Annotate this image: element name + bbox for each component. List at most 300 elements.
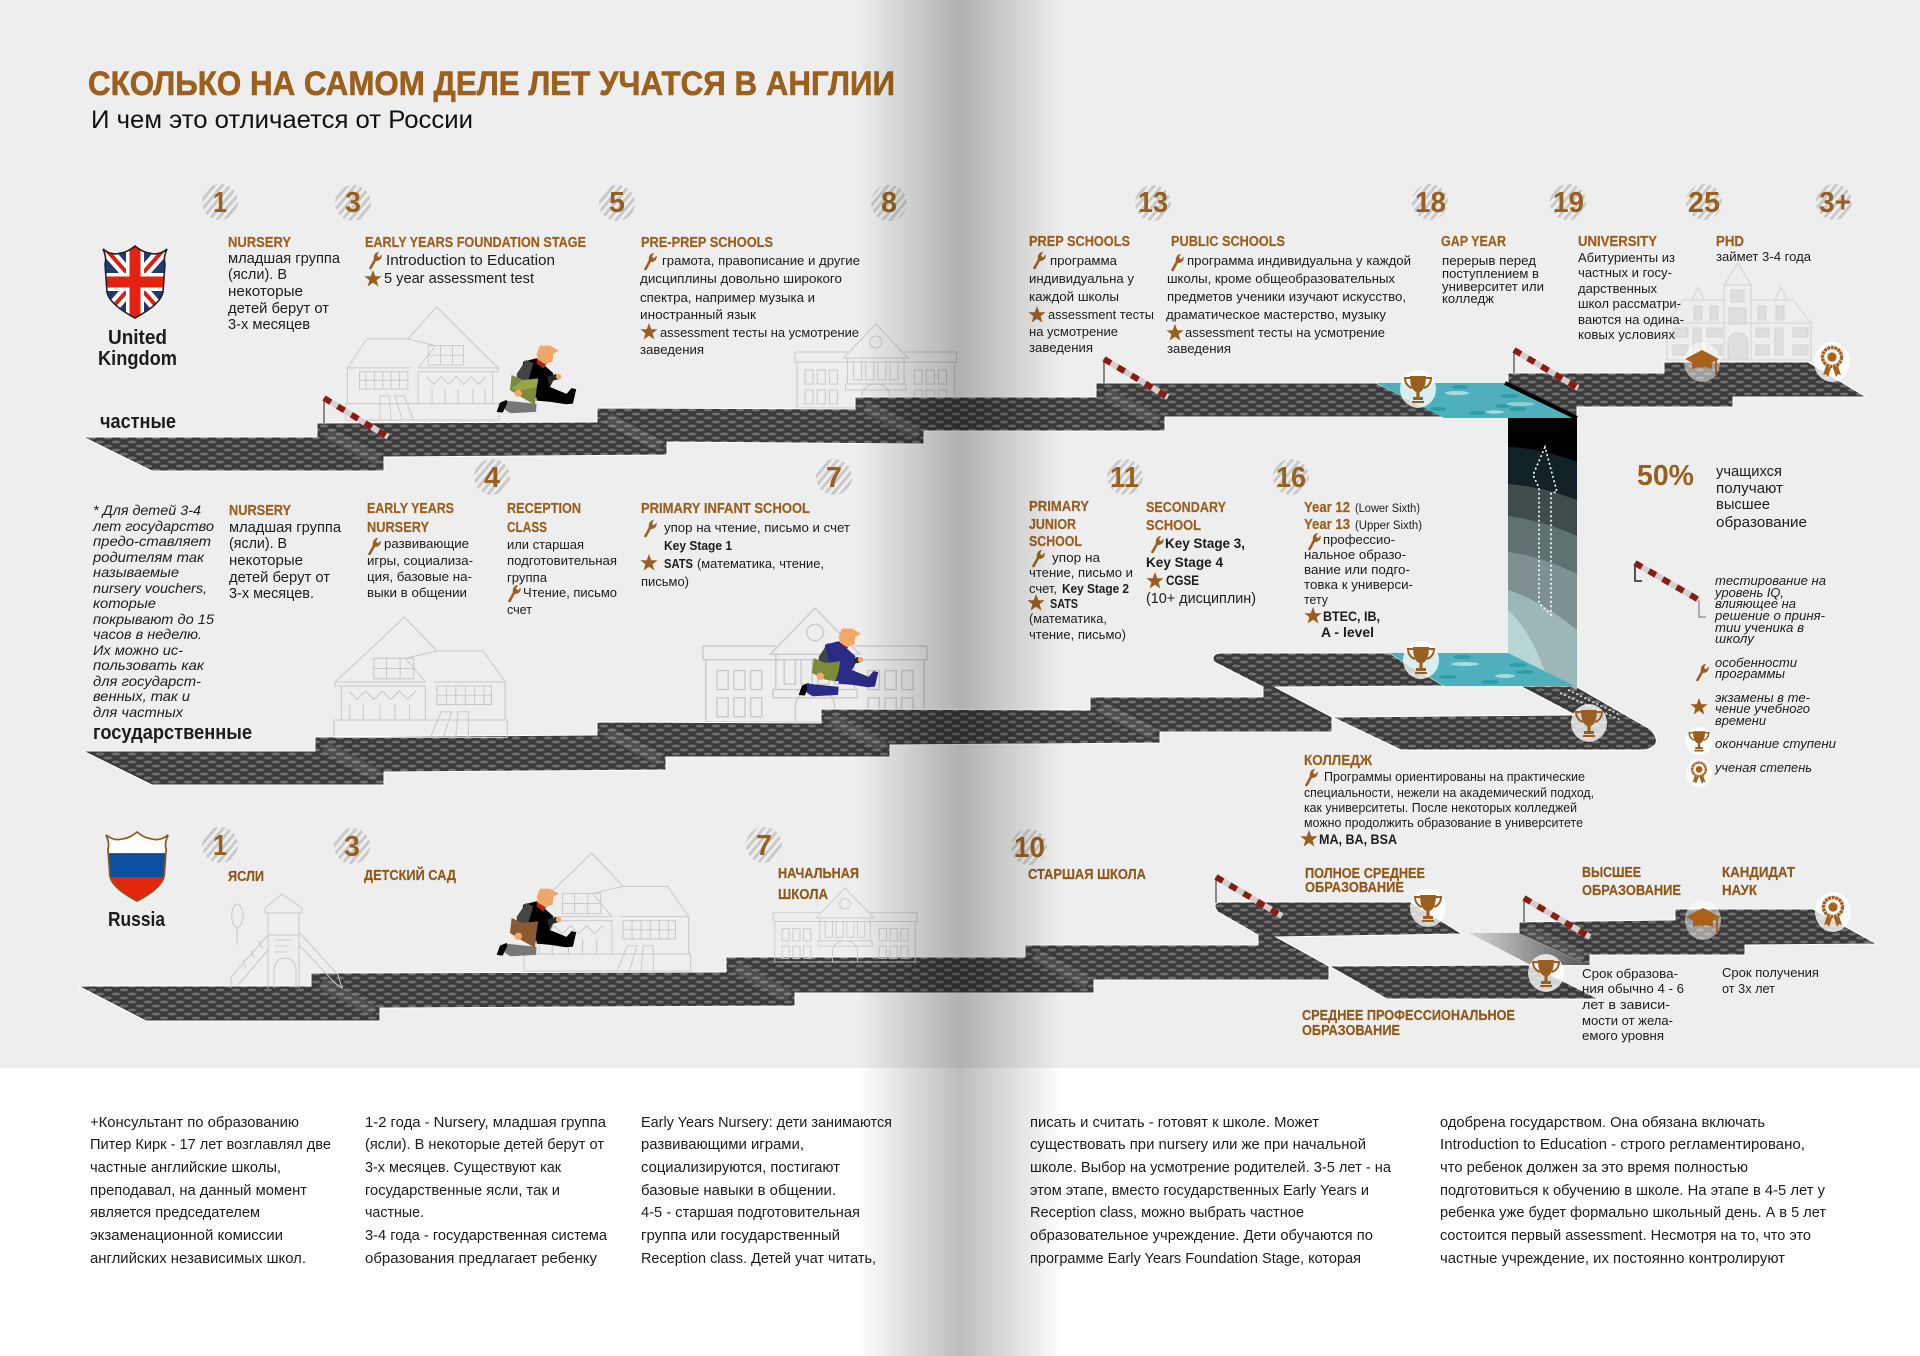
year markers row 3 [202, 827, 1047, 865]
text: primary junior school: чтение, письмо и [1029, 565, 1133, 580]
icon: Russia ribbon [1815, 892, 1851, 932]
year markers row 1: 8 [881, 187, 897, 219]
text: higher education duration: мости от жела- [1582, 1013, 1673, 1028]
barrier: private 13 [1104, 359, 1168, 397]
year markers row 2: 11 [1110, 462, 1139, 494]
label: United Kingdom [98, 327, 177, 370]
bottom text column 4: Reception class, можно выбрать частное [1030, 1205, 1304, 1221]
text: gap year: колледж [1442, 291, 1494, 306]
icon: trophy college [1571, 704, 1607, 742]
year markers row 1: 18 [1415, 187, 1446, 219]
legend: testing text: школу [1715, 632, 1755, 646]
text: secondary school: CGSE [1166, 572, 1199, 588]
icon: Russia trophy secondary [1410, 889, 1446, 927]
bottom text column 5: ребенка уже будет формально школьный день. А в 5 лет [1440, 1205, 1826, 1221]
text: reception class: подготовительная [507, 553, 617, 568]
bottom text column 1: экзаменационной комиссии [90, 1228, 283, 1244]
label: higher education: ВЫСШЕЕ [1582, 865, 1641, 881]
vertical drop between private and state schools [1508, 417, 1577, 690]
bottom text column 2: образования предлагает ребенку [365, 1251, 598, 1267]
text: nursery state: NURSERY [229, 503, 291, 519]
text: years 12 and 13: нальное образо- [1304, 547, 1406, 562]
text: years 12 and 13: A - level [1321, 624, 1374, 640]
text: reception class: RECEPTION [507, 501, 581, 517]
text: secondary school: Key Stage 3, [1165, 535, 1245, 551]
text: college: как университеты. После некоторых колледжей [1304, 800, 1577, 815]
text: primary junior school: (математика, [1029, 611, 1107, 626]
subtitle: И чем это отличается от России [91, 106, 473, 134]
label: kindergarten: ДЕТСКИЙ САД [364, 866, 457, 884]
playground with balloon [231, 894, 342, 988]
bottom text column 4: школе. Выбор на усмотрение родителей. 3-5 лет - на [1030, 1160, 1392, 1176]
text: prep schools: на усмотрение [1029, 324, 1118, 339]
legend: testing text: влияющее на [1715, 597, 1796, 611]
legend: degree text: ученая степень [1714, 761, 1812, 775]
buildings: university castle [1667, 263, 1811, 360]
label: vocational: ОБРАЗОВАНИЕ [1302, 1023, 1400, 1039]
text: public schools [1166, 234, 1411, 356]
label: primary school: ШКОЛА [778, 887, 828, 903]
text: public schools: школы, кроме общеобразовательных [1167, 271, 1396, 286]
text: university: ковых условиях [1578, 327, 1676, 342]
text: nursery state: (ясли). В [229, 536, 287, 552]
text: pre-prep schools: PRE-PREP SCHOOLS [641, 235, 773, 251]
text: higher education duration: емого уровня [1582, 1028, 1664, 1043]
label: state: государственные [93, 722, 252, 744]
text: vouchers footnote: для государст- [93, 673, 201, 689]
text: gap year: GAP YEAR [1441, 234, 1506, 250]
text: college: MA, BA, BSA [1319, 832, 1397, 847]
label: primary school [778, 866, 859, 903]
road: private school row [83, 383, 1444, 471]
bottom text column 3: 4-5 - старшая подготовительная [641, 1205, 860, 1221]
label: vocational [1302, 1008, 1515, 1039]
icon: trophy gap year [1400, 370, 1436, 408]
text: nursery state: некоторые [229, 553, 303, 569]
stat: 50 percent: высшее [1716, 496, 1770, 513]
text: early years foundation stage: 5 year assessment test [384, 270, 535, 287]
bottom text column 4: писать и считать - готовят к школе. Может [1030, 1115, 1319, 1131]
text: vouchers footnote: родителям так [92, 549, 205, 565]
stat: 50 percent: 50% [1637, 460, 1694, 492]
text: prep schools: PREP SCHOOLS [1029, 234, 1130, 250]
buildings: row 1 school [795, 324, 957, 408]
text: secondary school: SCHOOL [1146, 518, 1201, 534]
legend: programme features text: программы [1715, 667, 1785, 681]
text: primary infant school: (математика, чтение, [697, 556, 824, 571]
text: primary junior school [1027, 499, 1133, 642]
text: early years nursery: NURSERY [367, 520, 429, 536]
text: pre-prep schools: assessment тесты на усмотрение [660, 325, 859, 340]
stat: 50 percent: образование [1716, 514, 1807, 531]
text: pre-prep schools: иностранный язык [640, 307, 756, 322]
text: primary infant school [640, 501, 850, 589]
text: pre-prep schools: грамота, правописание и другие [662, 253, 860, 268]
text: vouchers footnote: Их можно ис- [93, 642, 183, 658]
black edge of the gap [1505, 383, 1577, 418]
text: candidate duration: Срок получения [1722, 965, 1819, 980]
buildings: row 1 house [346, 307, 499, 420]
bottom text column 3: развивающими играми, [641, 1137, 804, 1153]
text: university: школ рассматри- [1578, 296, 1681, 311]
bottom text column 1: преподавал, на данный момент [90, 1183, 307, 1199]
bottom text column 5: что ребенок должен за это время полностью [1440, 1160, 1748, 1176]
text: reception class: группа [507, 570, 548, 585]
year markers row 1: 3+ [1819, 187, 1851, 219]
text: vouchers footnote: лет государство [92, 518, 214, 534]
text: early years foundation stage: EARLY YEARS FOUNDATION STAGE [365, 235, 586, 251]
centre fold shadow [857, 0, 1063, 1356]
label: United Kingdom: United [108, 327, 167, 349]
step highlights on roads [321, 393, 1584, 1011]
label: full secondary [1305, 866, 1425, 896]
icon: ribbon [1814, 342, 1850, 382]
text: years 12 and 13: (Upper Sixth) [1355, 520, 1422, 532]
legend: programme features text [1715, 656, 1797, 681]
text: gap year [1441, 234, 1544, 306]
year markers row 1: 25 [1688, 187, 1720, 219]
text: university [1578, 234, 1684, 342]
barrier: private 5-8 [324, 398, 388, 437]
icon: Russia graduation cap [1685, 900, 1721, 940]
legend: testing text: решение о приня- [1714, 609, 1825, 623]
bottom text column 4: программе Early Years Foundation Stage, которая [1030, 1251, 1361, 1267]
text: vouchers footnote: для частных [93, 704, 184, 720]
year markers row 3: 10 [1014, 832, 1045, 864]
bottom text column 4: этом этапе, вместо государственных Early Years и [1030, 1183, 1369, 1199]
label: nursery: ЯСЛИ [228, 869, 264, 885]
text: higher education duration: лет в зависи- [1582, 997, 1670, 1012]
text: prep schools: заведения [1029, 340, 1093, 355]
bottom text column 5 [1440, 1115, 1826, 1267]
text: nursery private: младшая группа [228, 251, 341, 267]
text: prep schools: каждой школы [1029, 289, 1119, 304]
text: primary junior school: чтение, письмо) [1029, 627, 1126, 642]
text: primary infant school: Key Stage 1 [664, 538, 732, 553]
legend: barrier [1635, 563, 1706, 617]
text: pre-prep schools: спектра, например музыка и [640, 290, 815, 305]
bottom text column 5: Introduction to Education - строго регламентировано, [1440, 1137, 1805, 1153]
year markers row 3: 3 [344, 831, 360, 863]
text: primary junior school: Key Stage 2 [1062, 581, 1129, 596]
bottom text column 1: Питер Кирк - 17 лет возглавлял две [90, 1137, 331, 1153]
bottom text column 5: подготовиться к обучению в школе. На этапе в 4-5 лет у [1440, 1183, 1826, 1199]
text: public schools: драматическое мастерство, музыку [1166, 307, 1386, 322]
bottom text column 1: английских независимых школ. [90, 1251, 306, 1267]
buildings: row 2 school [703, 608, 927, 722]
text: public schools: заведения [1167, 341, 1231, 356]
text: primary infant school: SATS [664, 556, 693, 571]
text: years 12 and 13: профессио- [1323, 532, 1395, 547]
text: years 12 and 13: Year 12 [1304, 499, 1350, 516]
text: higher education duration: Срок образова- [1582, 966, 1678, 981]
text: gap year: поступлением в [1442, 266, 1539, 281]
text: nursery private: (ясли). В [228, 267, 287, 283]
label: United Kingdom: Kingdom [98, 348, 177, 370]
legend [1635, 563, 1836, 787]
text: pre-prep schools: дисциплины довольно широкого [640, 271, 842, 286]
label: candidate of sciences: НАУК [1722, 883, 1757, 899]
text: university: Абитуриенты из [1578, 250, 1675, 265]
bottom text column 1: +Консультант по образованию [90, 1115, 299, 1131]
text: years 12 and 13: Year 13 [1304, 516, 1350, 533]
year markers row 1: 5 [609, 187, 625, 219]
text: primary junior school: счет, [1029, 581, 1057, 596]
bottom text column 5: частные учреждение, их постоянно контролируют [1440, 1251, 1785, 1267]
year markers row 3: 7 [756, 830, 772, 862]
text: college: Программы ориентированы на практические [1324, 769, 1585, 784]
Russia stage labels [228, 865, 1795, 1039]
text: nursery state [229, 503, 342, 602]
text: public schools: assessment тесты на усмотрение [1185, 325, 1385, 340]
text: university: частных и госу- [1578, 265, 1672, 280]
shield: UK flag [103, 246, 167, 318]
text: vouchers footnote: * Для детей 3-4 [93, 502, 201, 518]
bottom text column 3: группа или государственный [641, 1228, 840, 1244]
text: nursery private: детей берут от [228, 301, 329, 317]
shield: Russia flag [106, 832, 168, 902]
legend: testing text: тии ученика в [1715, 621, 1804, 635]
text: prep schools: индивидуальна у [1029, 271, 1134, 286]
text: university: UNIVERSITY [1578, 234, 1657, 250]
text: gap year: перерыв перед [1442, 253, 1536, 268]
text: early years nursery: EARLY YEARS [367, 501, 454, 517]
text: college: можно продолжить образование в университете [1304, 815, 1583, 830]
text: nursery state: младшая группа [229, 520, 342, 536]
text: nursery state: 3-х месяцев. [229, 586, 314, 602]
label: private: частные [100, 411, 176, 433]
text: primary junior school: SATS [1050, 596, 1078, 611]
label: candidate of sciences [1722, 865, 1795, 899]
text: vouchers footnote: венных, так и [93, 688, 190, 704]
grey upper panel [0, 0, 1920, 1068]
legend: exams text: чение учебного [1715, 702, 1810, 716]
text: gap year: университет или [1442, 279, 1544, 294]
text: nursery state: детей берут от [229, 570, 330, 586]
text: primary junior school: JUNIOR [1029, 517, 1076, 533]
text: university: ваются на одина- [1578, 312, 1684, 327]
bottom text column 2: государственные ясли, так и [365, 1183, 560, 1199]
text: higher education duration [1582, 966, 1684, 1043]
text: years 12 and 13: тету [1304, 592, 1328, 607]
bottom text column 1 [90, 1115, 331, 1267]
text: university: дарственных [1578, 281, 1657, 296]
text: PhD: PHD [1716, 234, 1744, 250]
year markers row 2: 16 [1276, 462, 1306, 494]
legend: trophy [1686, 727, 1712, 755]
text: early years nursery: развивающие [384, 536, 469, 551]
barrier: university [1514, 350, 1578, 388]
text: vouchers footnote: которые [93, 595, 156, 611]
text: early years foundation stage: Introduction to Education [386, 252, 555, 269]
bottom text column 3: социализируются, постигают [641, 1160, 840, 1176]
year markers row 2: 4 [484, 462, 500, 494]
text: prep schools: assessment тесты [1048, 307, 1154, 322]
icon: Russia trophy vocational [1528, 954, 1564, 992]
bottom text column 3: Reception class. Детей учат читать, [641, 1251, 876, 1267]
text: vouchers footnote: покрывают до 15 [93, 611, 214, 627]
label: higher education [1582, 865, 1681, 899]
text: nursery private: 3-х месяцев [228, 317, 310, 333]
text: vouchers footnote: называемые [93, 564, 179, 580]
bottom text column 4 [1030, 1115, 1392, 1267]
bottom text column 5: одобрена государством. Она обязана включать [1440, 1115, 1765, 1131]
stat: 50 percent: учащихся [1716, 463, 1782, 480]
title: СКОЛЬКО НА САМОМ ДЕЛЕ ЛЕТ УЧАТСЯ В АНГЛИИ [88, 65, 895, 103]
buildings: Russia school [773, 888, 917, 962]
stat: 50 percent: получают [1716, 480, 1783, 497]
text: reception class: Чтение, письмо [523, 585, 617, 600]
year markers row 1: 3 [345, 187, 361, 219]
bottom text column 1: частные английские школы, [90, 1160, 281, 1176]
label: higher education: ОБРАЗОВАНИЕ [1582, 883, 1681, 899]
icon: trophy state row [1403, 641, 1439, 679]
road: Russia vocational branch [1329, 965, 1599, 999]
bottom text column 5: состоится первый assessment. Несмотря на то, что это [1440, 1228, 1811, 1244]
water: state row [1389, 653, 1575, 686]
text: nursery private: NURSERY [228, 235, 291, 251]
text: years 12 and 13 [1304, 499, 1422, 640]
bottom text column 2: (ясли). В некоторые детей берут от [365, 1137, 604, 1153]
bottom text column 2: 1-2 года - Nursery, младшая группа [365, 1115, 607, 1131]
text: vouchers footnote: пользовать как [93, 657, 205, 673]
text: college: специальности, нежели на академический подход, [1304, 785, 1594, 800]
year markers row 1: 19 [1553, 187, 1584, 219]
stat: 50 percent [1637, 460, 1807, 531]
road: Russia row [78, 902, 1462, 1021]
label: full secondary: ОБРАЗОВАНИЕ [1305, 880, 1404, 896]
road: college branch [1332, 686, 1656, 750]
legend: exams text: времени [1715, 714, 1766, 728]
year markers row 1: 1 [213, 187, 227, 219]
label: vocational: СРЕДНЕЕ ПРОФЕССИОНАЛЬНОЕ [1302, 1008, 1515, 1024]
text: primary infant school: письмо) [641, 574, 689, 589]
barrier: Russia secondary [1216, 877, 1282, 916]
year markers row 2: 7 [826, 462, 842, 494]
bottom text column 4: существовать при nursery или же при начальной [1030, 1137, 1366, 1153]
legend: testing text: уровень IQ, [1714, 586, 1784, 600]
legend: wrench [1698, 664, 1709, 680]
text: primary junior school: PRIMARY [1029, 499, 1089, 515]
bottom text column 3 [641, 1115, 892, 1267]
label: candidate of sciences: КАНДИДАТ [1722, 865, 1795, 881]
text: vouchers footnote: предо-ставляет [93, 533, 211, 549]
text: PhD [1716, 234, 1812, 264]
text: nursery private: некоторые [228, 284, 303, 300]
buildings: Russia house [524, 853, 691, 971]
text: pre-prep schools: заведения [640, 342, 704, 357]
label: primary school: НАЧАЛЬНАЯ [778, 866, 859, 882]
icon: graduation cap [1684, 342, 1720, 382]
text: early years nursery: ция, базовые на- [367, 569, 472, 584]
legend: ribbon [1686, 759, 1712, 787]
road: Russia fade transition [1469, 933, 1590, 965]
legend: testing text [1714, 574, 1826, 646]
text: public schools: предметов ученики изучают искусство, [1167, 289, 1406, 304]
text: public schools: PUBLIC SCHOOLS [1171, 234, 1285, 250]
bottom text column 2: частные. [365, 1205, 424, 1221]
label: full secondary: ПОЛНОЕ СРЕДНЕЕ [1305, 866, 1425, 882]
text: higher education duration: ния обычно 4 - 6 [1582, 981, 1684, 996]
dotted path on college road [1560, 690, 1621, 720]
buildings: row 2 house [334, 617, 507, 738]
text: prep schools [1028, 234, 1154, 355]
year markers row 1: 13 [1138, 187, 1168, 219]
year markers row 2 [474, 459, 1309, 495]
text: PhD: займет 3-4 года [1716, 249, 1812, 264]
text: vouchers footnote: часов в неделю. [93, 626, 202, 642]
runner: Russia row [497, 889, 576, 956]
label: Russia: Russia [108, 909, 166, 931]
text: reception class: счет [507, 602, 532, 617]
legend: testing text: тестирование на [1715, 574, 1826, 588]
text: secondary school: (10+ дисциплин) [1146, 590, 1256, 607]
bottom text column 3: базовые навыки в общении. [641, 1183, 836, 1199]
text: years 12 and 13: (Lower Sixth) [1355, 503, 1420, 515]
text: years 12 and 13: товка к универси- [1304, 577, 1413, 592]
bottom text column 1: является председателем [90, 1205, 260, 1221]
label: senior school: СТАРШАЯ ШКОЛА [1028, 867, 1146, 883]
barrier: Russia higher [1524, 898, 1590, 937]
text: candidate duration: от 3х лет [1722, 981, 1775, 996]
text: pre-prep schools [640, 235, 860, 357]
year markers row 3: 1 [213, 830, 227, 862]
text: years 12 and 13: BTEC, IB, [1323, 608, 1380, 624]
text: reception class: или старшая [507, 537, 584, 552]
legend: stage end text: окончание ступени [1715, 737, 1836, 751]
text: early years foundation stage [364, 235, 586, 287]
text: years 12 and 13: вание или подго- [1304, 562, 1410, 577]
text: candidate duration [1722, 965, 1819, 996]
text: college: КОЛЛЕДЖ [1304, 753, 1373, 769]
water: private gap year [1376, 383, 1577, 418]
road: Russia higher education [1519, 909, 1877, 965]
text: college [1300, 753, 1594, 847]
runner: state row [799, 629, 878, 696]
text: secondary school: Key Stage 4 [1146, 554, 1223, 570]
legend: programme features text: особенности [1715, 656, 1797, 670]
text: primary infant school: PRIMARY INFANT SCHOOL [641, 501, 810, 517]
bottom text column 2: 3-4 года - государственная система [365, 1228, 608, 1244]
runner: private row [497, 346, 576, 413]
text: early years nursery: игры, социализа- [367, 553, 473, 568]
road: state school row [83, 653, 1444, 785]
text: nursery private [228, 235, 341, 333]
bottom text column 2 [365, 1115, 608, 1267]
bottom text column 3: Early Years Nursery: дети занимаются [641, 1115, 892, 1131]
text: primary junior school: упор на [1052, 550, 1101, 565]
legend: star [1690, 698, 1708, 714]
year markers row 1 [202, 184, 1852, 221]
text: reception class: CLASS [507, 520, 547, 536]
road: private row after the gap [1508, 362, 1866, 418]
text: primary infant school: упор на чтение, письмо и счет [664, 520, 850, 535]
legend: exams text: экзамены в те- [1715, 691, 1810, 705]
bottom text column 2: 3-х месяцев. Существуют как [365, 1160, 562, 1176]
text: reception class [507, 501, 617, 617]
text: secondary school [1146, 500, 1256, 607]
text: secondary school: SECONDARY [1146, 500, 1226, 516]
text: prep schools: программа [1050, 253, 1118, 268]
text: primary junior school: SCHOOL [1029, 534, 1082, 550]
text: public schools: программа индивидуальна у каждой [1187, 253, 1411, 268]
text: early years nursery [367, 501, 473, 600]
text: early years nursery: выки в общении [367, 585, 467, 600]
legend: exams text [1715, 691, 1810, 728]
text: vouchers footnote [92, 502, 214, 720]
bottom text column 4: образовательное учреждение. Дети обучаются по [1030, 1228, 1373, 1244]
text: vouchers footnote: nursery vouchers, [93, 580, 207, 596]
